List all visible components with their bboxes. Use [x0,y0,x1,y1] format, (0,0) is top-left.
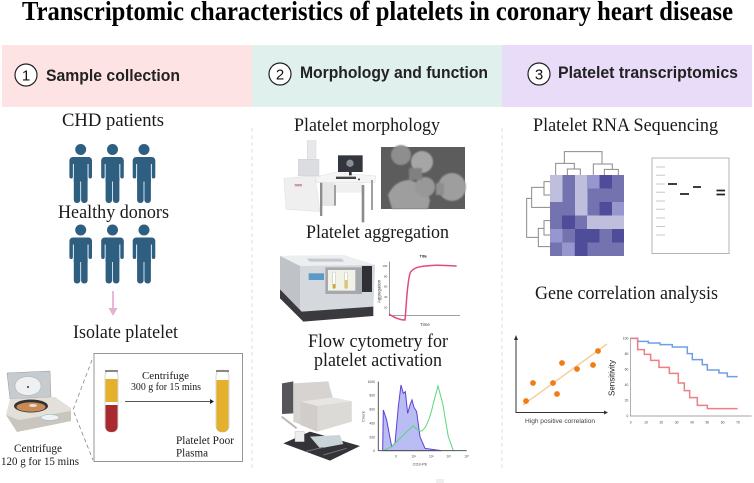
icon: aggregometer [280,255,375,322]
chart: flow cytometry histogram: 0 [373,449,375,453]
centrifuge step label [131,370,201,393]
chart: flow cytometry histogram: 10⁴ [447,454,452,458]
image: platelet micrograph [381,145,466,209]
chart: aggregation curve: 80 [384,274,388,278]
chart: aggregation curve: 20 [384,305,388,309]
header band: platelet transcriptomics [502,45,752,107]
icons: healthy donor figures [69,224,155,284]
header band: platelet transcriptomics: 3 [535,66,543,84]
heading: isolate platelet: Isolate platelet [73,322,179,343]
centrifuge caption: Centrifuge [14,443,62,455]
platelet poor plasma label [176,433,234,460]
centrifuge step label: Centrifuge [142,370,189,382]
icons: CHD patient figures [69,144,155,203]
chart: gel electrophoresis [652,158,729,254]
chart: sensitivity step curves: 20 [625,398,628,402]
chart: aggregation curve: 60 [384,285,388,289]
chart: flow cytometry histogram: 400 [369,422,375,426]
chart: flow cytometry histogram [361,380,470,466]
platelet poor plasma label: Platelet Poor [176,433,234,447]
divider [251,128,253,470]
icon: flow cytometer [282,381,360,461]
header band: sample collection [2,45,252,107]
header band: morphology and function: 2 [276,66,284,84]
chart: flow cytometry histogram: 800 [369,394,375,398]
chart: flow cytometry histogram: CD3-PE [413,461,428,466]
header band: sample collection: 1 [22,68,30,84]
divider [501,128,503,470]
heading: flow cytometry: platelet activation [314,351,442,371]
bottom smudge [436,479,444,483]
panel: morphology and function [252,45,502,483]
heading: gene correlation: Gene correlation analysis [535,284,718,304]
tube: whole blood separated [105,370,118,432]
chart: clustered heatmap [527,152,624,256]
chart: flow cytometry histogram: 600 [369,408,375,412]
centrifuge caption: 120 g for 15 mins [1,456,79,468]
header band: morphology and function: Morphology and function [300,63,488,82]
heading: flow cytometry [308,332,448,371]
icon: scanning electron microscope [284,141,376,222]
heading: platelet morphology: Platelet morphology [294,116,441,136]
centrifuge caption [1,443,79,468]
chart: flow cytometry histogram: Count [361,410,366,422]
chart: sensitivity step curves: 60 [721,421,725,425]
chart: flow cytometry histogram: 1000 [368,380,375,384]
heading: CHD patients: CHD patients [62,110,164,131]
dendrograms [527,152,618,247]
heatmap cells [550,175,624,256]
chart: flow cytometry histogram: 10² [411,454,416,458]
platelet poor plasma label: Plasma [176,446,209,460]
chart: aggregation curve: Aggregation [377,279,382,303]
chart: aggregation curve: 40 [384,295,388,299]
arrow: centrifuge step [125,399,214,404]
chart: sensitivity step curves: 40 [625,383,628,387]
chart: sensitivity step curves: 0 [630,421,632,425]
chart: sensitivity step curves: 20 [659,421,663,425]
panel: platelet transcriptomics [502,45,752,425]
header band: morphology and function [252,45,502,107]
chart: sensitivity step curves: 60 [625,367,628,371]
chart: sensitivity step curves: 80 [625,352,628,356]
chart: scatter correlation [514,335,608,425]
chart: flow cytometry histogram: 200 [369,435,375,439]
heading: healthy donors: Healthy donors [58,202,169,223]
chart: aggregation curve [377,254,460,320]
chart: flow cytometry histogram: 10⁵ [464,454,470,458]
callout box: second centrifugation [94,354,242,462]
chart: sensitivity step curves: 30 [675,421,679,425]
header band: platelet transcriptomics: Platelet transcriptomics [558,63,738,82]
chart: sensitivity step curves: 0 [626,414,628,418]
tube: platelet poor plasma [216,370,229,432]
chart: flow cytometry histogram: 0 [395,454,397,458]
chart: sensitivity step curves: 70 [736,421,740,425]
chart: sensitivity step curves: 100 [623,336,628,340]
chart: sensitivity step curves: 40 [690,421,694,425]
icon: centrifuge machine [6,371,71,432]
chart: aggregation curve: Title [420,254,427,258]
chart: flow cytometry histogram: 10³ [429,454,434,458]
chart: sensitivity step curves: 50 [705,421,709,425]
heading: flow cytometry: Flow cytometry for [308,332,448,352]
heading: platelet aggregation: Platelet aggregation [306,223,449,243]
heading: RNA sequencing: Platelet RNA Sequencing [533,116,718,136]
chart: sensitivity step curves: Sensitivity [608,360,617,396]
dashed callout lines [73,360,93,460]
chart: sensitivity step curves [608,336,752,425]
panel: sample collection [1,45,252,468]
chart: aggregation curve: 100 [382,264,388,268]
centrifuge step label: 300 g for 15 mins [131,381,201,393]
axis label: time: Time [420,322,430,327]
header band: sample collection: Sample collection [46,66,180,85]
chart: scatter correlation: High positive correlation [525,418,595,425]
chart: sensitivity step curves: 10 [644,421,648,425]
arrow: down to isolate platelet [108,291,118,316]
